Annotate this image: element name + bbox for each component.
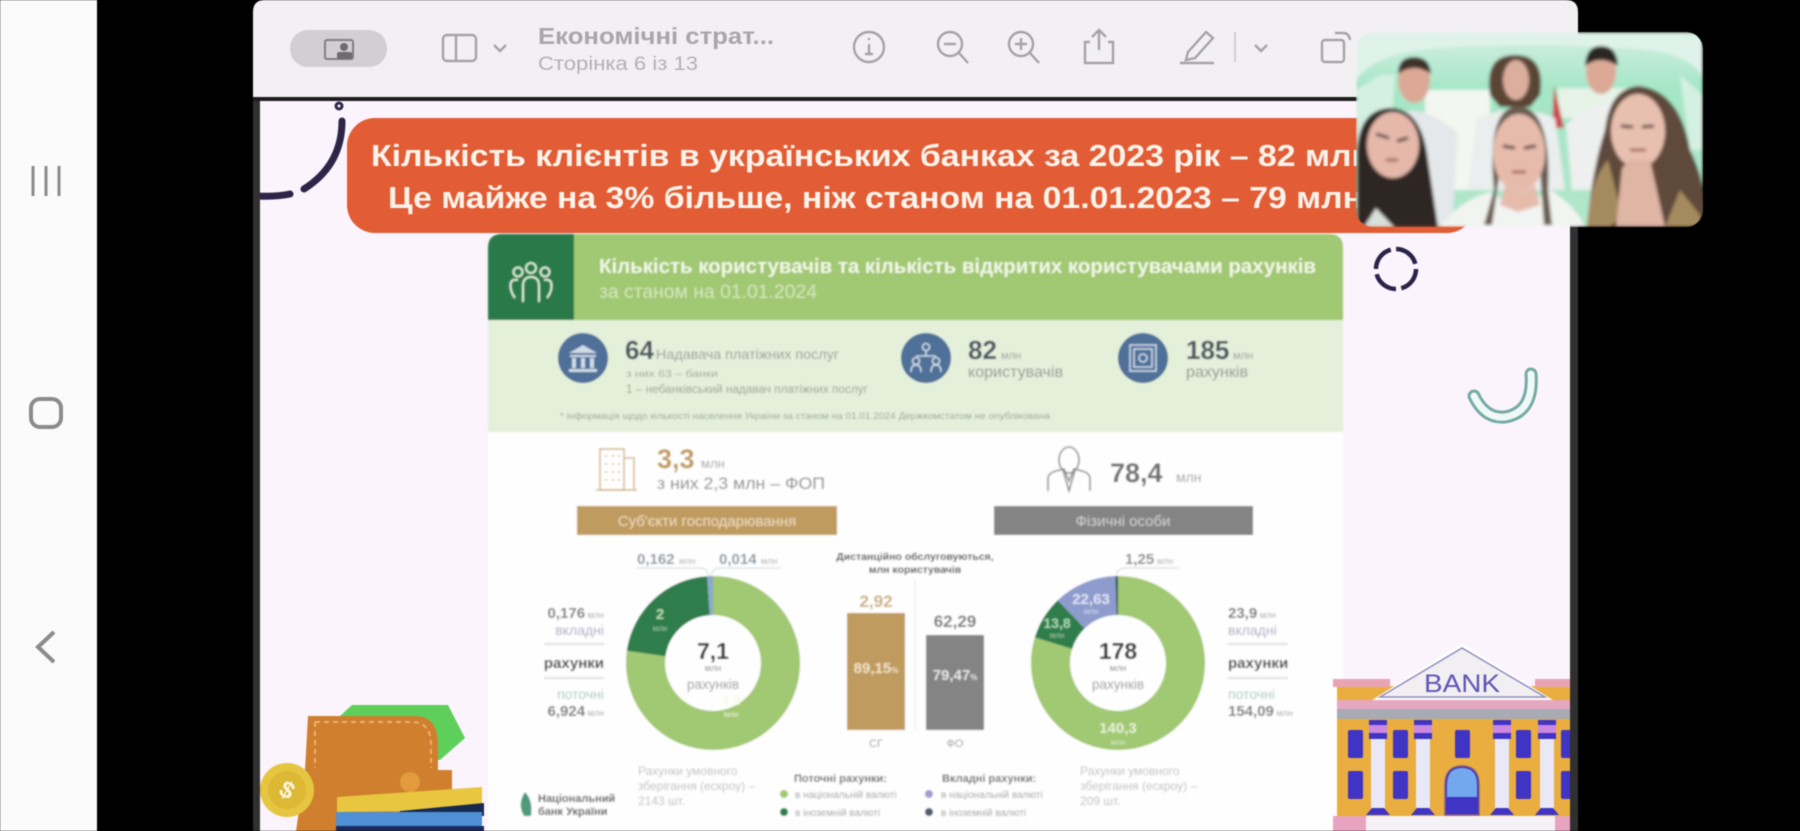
individuals side labels [1228, 605, 1293, 720]
business header: з них 2,3 млн – ФОП [657, 474, 825, 493]
illustration: wallet [260, 705, 484, 831]
stat: users: 82 [968, 335, 997, 365]
wallet clasp [400, 772, 420, 792]
icon: markup pen [1180, 32, 1214, 63]
business donut chart [646, 596, 780, 730]
columns [1366, 720, 1559, 815]
business donut chart: 7,1 [697, 638, 729, 664]
infographic panel [488, 234, 1343, 831]
legend: deposit accounts [925, 773, 1043, 819]
individuals side labels: вкладні [1228, 622, 1277, 638]
icon: building [596, 449, 637, 490]
business donut callouts [637, 551, 782, 576]
stat: providers: з них 63 – банки [626, 368, 718, 380]
stat: users: користувачів [968, 364, 1063, 381]
icon: users [510, 263, 552, 302]
individuals donut chart: млн [1110, 663, 1126, 673]
individuals header [1048, 447, 1202, 491]
legend: deposit accounts: Вкладні рахунки: [942, 773, 1036, 785]
pediment: BANK [1424, 670, 1500, 698]
front row: middle student [1440, 106, 1585, 227]
stat: providers [558, 333, 868, 396]
bar: ФО: 79,47% [933, 667, 977, 684]
business side labels [544, 605, 604, 720]
bar: СГ: СГ [869, 738, 883, 750]
individuals donut callout [1116, 551, 1178, 575]
door [1445, 766, 1479, 815]
escrow note left [638, 764, 755, 808]
individuals donut chart: 140,3 [1099, 720, 1137, 737]
individuals donut chart [1043, 591, 1186, 747]
individuals header: млн [1176, 469, 1202, 485]
business side labels: вкладні [555, 622, 604, 638]
individuals donut chart: млн [1084, 607, 1098, 616]
individuals side labels: рахунки [1228, 655, 1288, 672]
icon: share [1085, 30, 1113, 63]
stat: accounts: млн [1233, 350, 1253, 362]
individuals side labels: 23,9 млн [1228, 605, 1276, 622]
individuals header: 78,4 [1110, 458, 1163, 488]
business donut callouts: млн [761, 556, 777, 566]
cards [337, 787, 482, 812]
label bar: individuals [994, 506, 1253, 535]
flag [1552, 85, 1564, 128]
stat: users: млн [1001, 350, 1021, 362]
individuals donut chart: млн [1111, 738, 1125, 747]
panel header [488, 234, 1343, 320]
escrow note right [1080, 764, 1197, 808]
bar: ФО [926, 612, 984, 750]
escrow note left: Рахунки умовного [638, 764, 738, 778]
banner text line 1: Кількість клієнтів в українських банках за 2023 рік – 82 млн [371, 138, 1372, 173]
banner text line 2: Це майже на 3% більше, ніж станом на 01.01.2023 – 79 млн [388, 180, 1363, 215]
webcam video overlay [1356, 32, 1705, 227]
coin: $ [274, 775, 300, 806]
coin [260, 763, 314, 817]
legend: current accounts: в національній валюті [795, 790, 897, 801]
icon: sidebar [443, 35, 506, 61]
logo: National Bank of Ukraine: банк України [538, 806, 607, 818]
individuals donut chart: 178 [1099, 638, 1137, 664]
stat: providers: 1 – небанківський надавач платіжних послуг [626, 384, 868, 396]
business side labels: 0,176 млн [548, 605, 604, 622]
logo: National Bank of Ukraine: Національний [538, 793, 615, 805]
individuals side labels: 154,09 млн [1228, 703, 1293, 720]
legend: current accounts [780, 773, 897, 819]
individuals donut chart: млн [1050, 631, 1064, 640]
front row: right student [1587, 86, 1705, 227]
icon: zoom in [1009, 32, 1039, 63]
room background [1356, 32, 1703, 227]
pediment [1375, 645, 1550, 700]
wall [1337, 686, 1577, 816]
toolbar [253, 0, 1578, 101]
bar: ФО: 62,29 [934, 612, 976, 631]
legend: deposit accounts: в іноземній валюті [941, 808, 1026, 819]
legend: deposit accounts: в національній валюті [941, 790, 1043, 801]
front row: left student [1357, 108, 1438, 227]
footnote: * інформація щодо кількості населення України за станом на 01.01.2024 Держкомстатом не опублікована [560, 411, 1051, 422]
page number: Сторінка 6 із 13 [538, 54, 698, 75]
header subtitle: за станом на 01.01.2024 [599, 282, 817, 303]
business donut chart: 2 [656, 606, 664, 623]
business donut callouts: млн [679, 556, 695, 566]
label bar: business [577, 506, 837, 535]
business header: 3,3 [657, 444, 695, 474]
phone navigation bar [0, 0, 97, 831]
business donut chart: млн [724, 710, 738, 719]
legend: current accounts: в іноземній валюті [795, 808, 880, 819]
business donut callouts: 0,162 [637, 551, 675, 568]
illustration: bank building [1333, 645, 1580, 831]
individuals donut callout: 1,25 [1125, 551, 1154, 568]
individuals side labels: поточні [1228, 686, 1275, 702]
decoration: dashed ring [1376, 249, 1416, 289]
stat: providers: Надавача платіжних послуг [656, 346, 839, 362]
stat: accounts [1118, 333, 1253, 383]
bar: ФО: ФО [947, 738, 964, 750]
logo: National Bank of Ukraine [521, 792, 615, 818]
decoration: dark arc [258, 104, 342, 196]
wallet body [296, 716, 452, 831]
business donut callouts: 0,014 [719, 551, 757, 568]
legend: current accounts: Поточні рахунки: [794, 773, 887, 785]
stats band [488, 320, 1343, 432]
back row: middle student [1468, 55, 1565, 190]
individuals donut chart: 22,63 [1072, 591, 1110, 608]
remote service bar chart [836, 551, 994, 750]
orange banner [347, 118, 1475, 233]
icon: chevron [1255, 45, 1267, 51]
icon: recent apps [33, 166, 59, 196]
escrow note right: зберігання (ескроу) – [1080, 779, 1197, 793]
remote service bar chart: Дистанційно обслуговуються, [836, 551, 994, 563]
slide background [260, 101, 1570, 831]
business side labels: поточні [557, 686, 604, 702]
business donut chart: 4,9 [721, 692, 741, 709]
icon: back [38, 632, 54, 662]
icon: info [854, 32, 884, 62]
escrow note right: Рахунки умовного [1080, 764, 1180, 778]
business donut chart: рахунків [687, 677, 739, 692]
icon: rotate [1322, 33, 1350, 62]
business donut chart: млн [705, 663, 721, 673]
business donut chart: млн [653, 624, 667, 633]
bar: СГ: 89,15% [854, 660, 898, 677]
business header [596, 444, 825, 493]
icon: zoom out [938, 32, 968, 63]
individuals donut callout: млн [1157, 556, 1173, 566]
icon: presenter pill [290, 30, 387, 67]
decoration: teal crescent [1474, 374, 1531, 417]
icon: home [31, 399, 61, 427]
stat: providers: 64 [625, 335, 654, 365]
business side labels: 6,924 млн [548, 703, 604, 720]
remote service bar chart: млн користувачів [869, 564, 962, 576]
stat: accounts: рахунків [1186, 364, 1248, 381]
bar: СГ [847, 592, 905, 750]
business side labels: рахунки [544, 655, 604, 672]
cornice [1333, 679, 1580, 687]
escrow note left: зберігання (ескроу) – [638, 779, 755, 793]
back row: right student [1566, 46, 1618, 190]
escrow note left: 2143 шт. [638, 794, 685, 808]
header title: Кількість користувачів та кількість відкритих користувачами рахунків [599, 255, 1316, 278]
stat: users [901, 333, 1063, 383]
banknotes [340, 705, 465, 760]
steps [1333, 816, 1580, 831]
label bar: individuals: Фізичні особи [1076, 513, 1170, 530]
label bar: business: Суб'єкти господарювання [618, 513, 796, 530]
individuals donut chart: 13,8 [1043, 615, 1071, 631]
window edge strips [253, 100, 1578, 831]
document title: Економічні страт... [538, 23, 774, 49]
stat: accounts: 185 [1186, 335, 1229, 365]
individuals donut chart: рахунків [1092, 677, 1144, 692]
business header: млн [701, 456, 725, 471]
bar: СГ: 2,92 [859, 592, 893, 611]
escrow note right: 209 шт. [1080, 794, 1120, 808]
windows [1348, 730, 1576, 799]
icon: person [1048, 447, 1090, 491]
back row: left student [1398, 57, 1458, 225]
